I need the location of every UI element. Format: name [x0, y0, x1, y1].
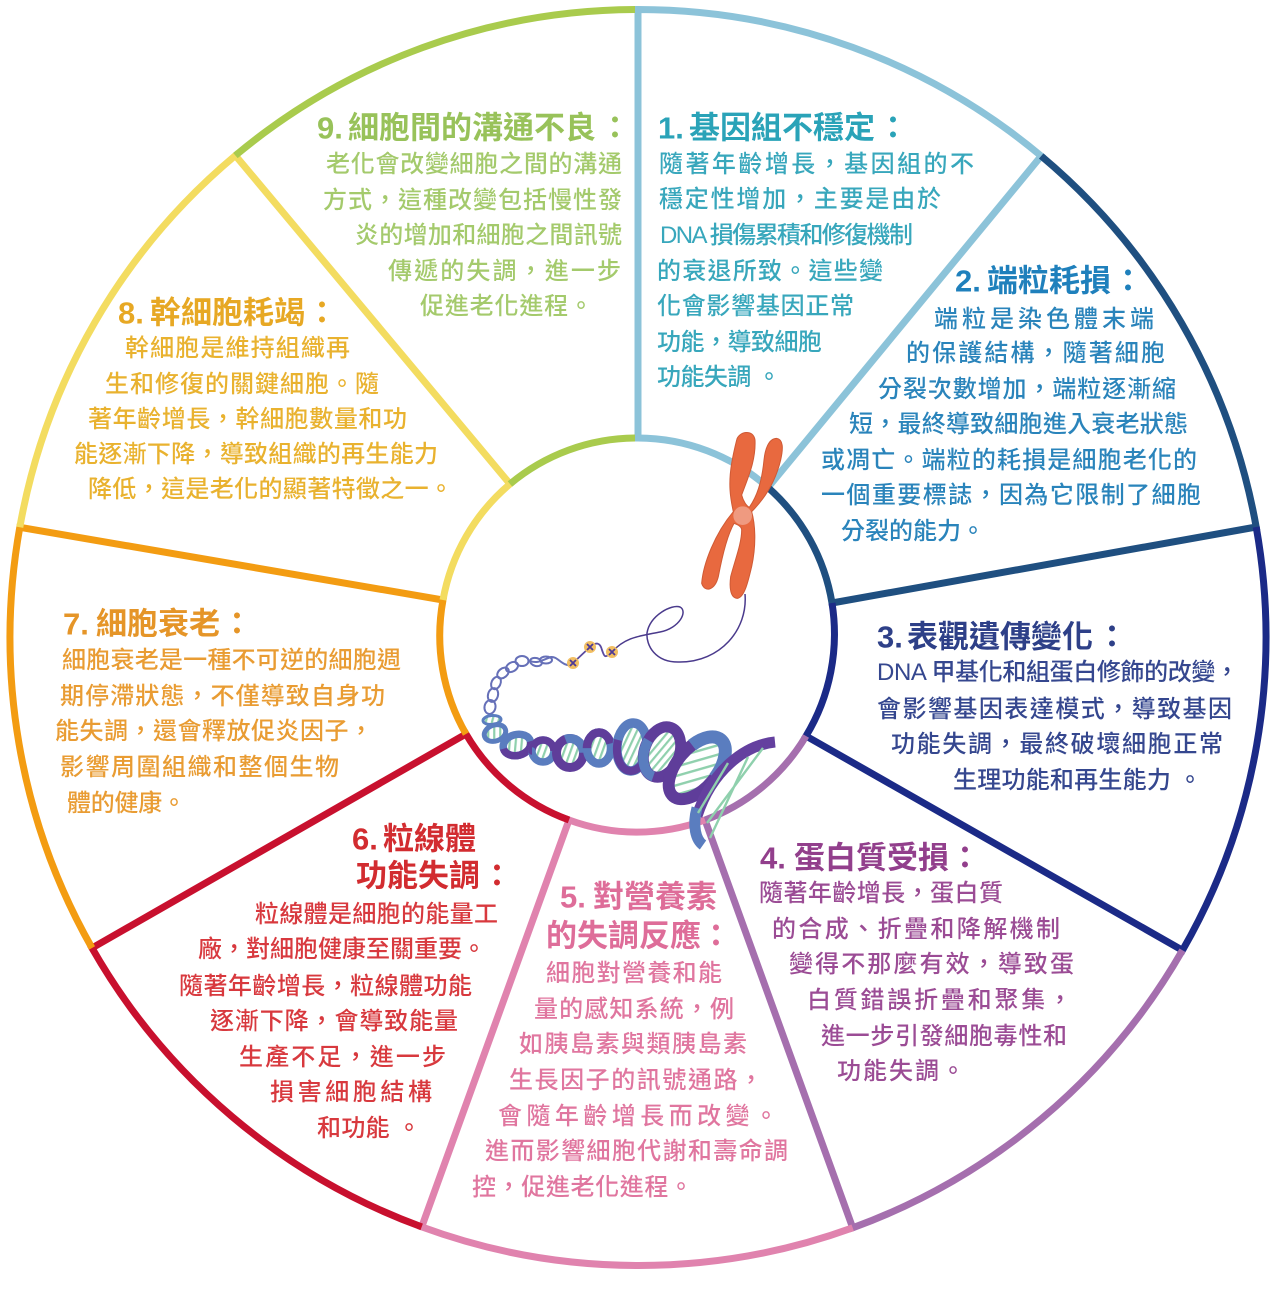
segment outline: orange [10, 527, 466, 948]
body text 1: 隨著年齡增長，基因組的不 [659, 151, 974, 178]
heading 7: ： [222, 606, 252, 642]
body text 8: 著年齡增長，幹細胞數量和功 [88, 406, 407, 433]
heading 6: 功能失調 [356, 858, 480, 894]
body text 1: DNA 損傷累積和修復機制 [660, 222, 913, 249]
body text 8: 能逐漸下降，導致組織的再生能力 [74, 441, 438, 468]
body text 4: 功能失調。 [837, 1058, 965, 1085]
body text 4: 進一步引發細胞毒性和 [821, 1023, 1067, 1050]
illustration: thin DNA thread [483, 594, 745, 715]
heading 6: ： [482, 858, 512, 894]
body text 3: 生理功能和再生能力 。 [953, 767, 1202, 794]
heading 1: ： [878, 110, 908, 146]
segment outline: green [235, 10, 635, 484]
illustration: DNA double helix [482, 715, 775, 845]
body text 9: 方式，這種改變包括慢性發 [323, 187, 622, 214]
heading 6 [352, 822, 512, 894]
body text 5: 量的感知系統，例 [534, 996, 734, 1023]
panel: 2 telomere attrition [768, 156, 1256, 603]
body text 2: 一個重要標誌，因為它限制了細胞 [821, 482, 1201, 509]
body text 2: 的保護結構，隨著細胞 [906, 340, 1165, 367]
illustration: nucleosome beads [567, 641, 618, 669]
body text 3: 會影響基因表達模式，導致基因 [877, 696, 1232, 723]
heading 7: 7. [63, 606, 89, 642]
body text 2: 或凋亡。端粒的耗損是細胞老化的 [821, 447, 1197, 474]
heading 6: 粒線體 [383, 822, 476, 856]
panel: 5 nutrient sensing [422, 820, 853, 1265]
body text 3: 功能失調，最終破壞細胞正常 [891, 731, 1223, 758]
body text 6: 隨著年齡增長，粒線體功能 [179, 973, 472, 1000]
body text 5: 控，促進老化進程。 [472, 1174, 693, 1201]
segment outline: dark blue [768, 156, 1256, 603]
body text 7: 能失調，還會釋放促炎因子， [55, 718, 373, 745]
panel: 7 cellular senescence [10, 527, 466, 948]
body text 7: 細胞衰老是一種不可逆的細胞週 [62, 647, 401, 674]
body text 5: 進而影響細胞代謝和壽命調 [485, 1138, 788, 1165]
panel: 8 stem cell exhaustion [20, 156, 510, 600]
body text 9: 炎的增加和細胞之間訊號 [355, 222, 622, 249]
heading 9: 9. [317, 110, 343, 146]
body text 2: 端粒是染色體末端 [934, 306, 1154, 333]
body text 6: 廠，對細胞健康至關重要。 [198, 936, 486, 963]
body text 5 [472, 960, 788, 1201]
heading 5: 的失調反應 [546, 918, 701, 954]
body text 6: 損害細胞結構 [270, 1079, 432, 1106]
heading 8: 幹細胞耗竭 [150, 296, 305, 330]
body text 2: 分裂的能力。 [841, 518, 985, 545]
heading 2: 端粒耗損 [987, 264, 1111, 298]
body text 8: 幹細胞是維持組織再 [125, 335, 350, 362]
panel: 6 mitochondrial dysfunction [92, 734, 569, 1227]
segment outline: red [92, 734, 569, 1227]
body text 3: DNA 甲基化和組蛋白修飾的改變， [877, 659, 1239, 686]
body text 6: 和功能 。 [317, 1115, 421, 1142]
body text 3 [877, 659, 1239, 794]
heading 7: 細胞衰老 [96, 606, 220, 642]
body text 1: 功能失調 。 [657, 364, 781, 391]
body text 8: 降低，這是老化的顯著特徵之一。 [88, 476, 453, 503]
segment outline: yellow [20, 156, 510, 600]
heading 1: 基因組不穩定 [689, 110, 875, 146]
body text 4: 隨著年齡增長，蛋白質 [759, 880, 1003, 907]
heading 2: 2. [955, 264, 981, 298]
body text 8 [74, 335, 453, 503]
heading 3: 表觀遺傳變化 [907, 620, 1093, 654]
body text 4: 的合成、折疊和降解機制 [772, 916, 1060, 943]
body text 1: 的衰退所致。這些變 [657, 258, 883, 285]
heading 1: 1. [658, 110, 684, 146]
body text 7 [55, 647, 401, 817]
body text 1: 化會影響基因正常 [657, 293, 854, 320]
heading 3: ： [1096, 620, 1128, 654]
body text 9 [323, 151, 622, 320]
heading 3: 3. [877, 620, 903, 654]
body text 4 [759, 880, 1074, 1085]
heading 5: ： [700, 918, 732, 954]
panel: 9 altered intercellular communication [235, 10, 635, 484]
body text 9: 老化會改變細胞之間的溝通 [326, 151, 622, 178]
panel: 3 epigenetic alterations [806, 527, 1266, 950]
body text 2: 分裂次數增加，端粒逐漸縮 [878, 376, 1176, 403]
heading 5: 對營養素 [593, 880, 717, 914]
body text 6: 逐漸下降，會導致能量 [210, 1008, 458, 1035]
body text 7: 影響周圍組織和整個生物 [60, 754, 339, 781]
body text 1: 穩定性增加，主要是由於 [659, 186, 941, 213]
segment outline: purple [705, 736, 1182, 1228]
body text 6: 生產不足，進一步 [239, 1044, 446, 1071]
body text 2: 短，最終導致細胞進入衰老狀態 [849, 411, 1188, 438]
body text 2 [821, 306, 1201, 545]
body text 9: 傳遞的失調，進一步 [388, 258, 621, 285]
heading 2: ： [1112, 264, 1144, 298]
heading 4: 4. [760, 840, 786, 876]
heading 4: 蛋白質受損 [794, 840, 949, 876]
heading 4: ： [950, 840, 980, 876]
illustration: chromosome [702, 432, 782, 598]
body text 7: 體的健康。 [67, 790, 186, 817]
body text 5: 如胰島素與類胰島素 [519, 1031, 747, 1058]
body text 1: 功能，導致細胞 [657, 329, 822, 356]
heading 8: ： [306, 296, 338, 330]
body text 4: 變得不那麼有效，導致蛋 [789, 951, 1074, 978]
heading 5 [546, 880, 732, 954]
body text 9: 促進老化進程。 [420, 293, 593, 320]
body text 5: 會隨年齡增長而改變。 [498, 1103, 778, 1130]
segment outline: light blue [638, 9, 1041, 487]
body text 5: 生長因子的訊號通路， [509, 1067, 763, 1094]
heading 9: 細胞間的溝通不良 [348, 110, 596, 146]
panel: 1 genomic instability [638, 9, 1041, 487]
body text 6 [179, 901, 498, 1142]
panel: 4 loss of proteostasis [705, 736, 1182, 1228]
heading 8: 8. [118, 296, 144, 330]
body text 7: 期停滯狀態，不僅導致自身功 [60, 683, 385, 710]
body text 8: 生和修復的關鍵細胞。隨 [105, 371, 379, 398]
heading 5: 5. [560, 880, 586, 914]
body text 5: 細胞對營養和能 [546, 960, 722, 987]
heading 9: ： [600, 110, 630, 146]
body text 6: 粒線體是細胞的能量工 [255, 901, 498, 928]
body text 4: 白質錯誤折疊和聚集， [807, 987, 1072, 1014]
segment outline: pink [422, 820, 853, 1265]
segment outline: navy [806, 527, 1266, 950]
body text 1 [657, 151, 974, 391]
heading 6: 6. [352, 822, 378, 856]
